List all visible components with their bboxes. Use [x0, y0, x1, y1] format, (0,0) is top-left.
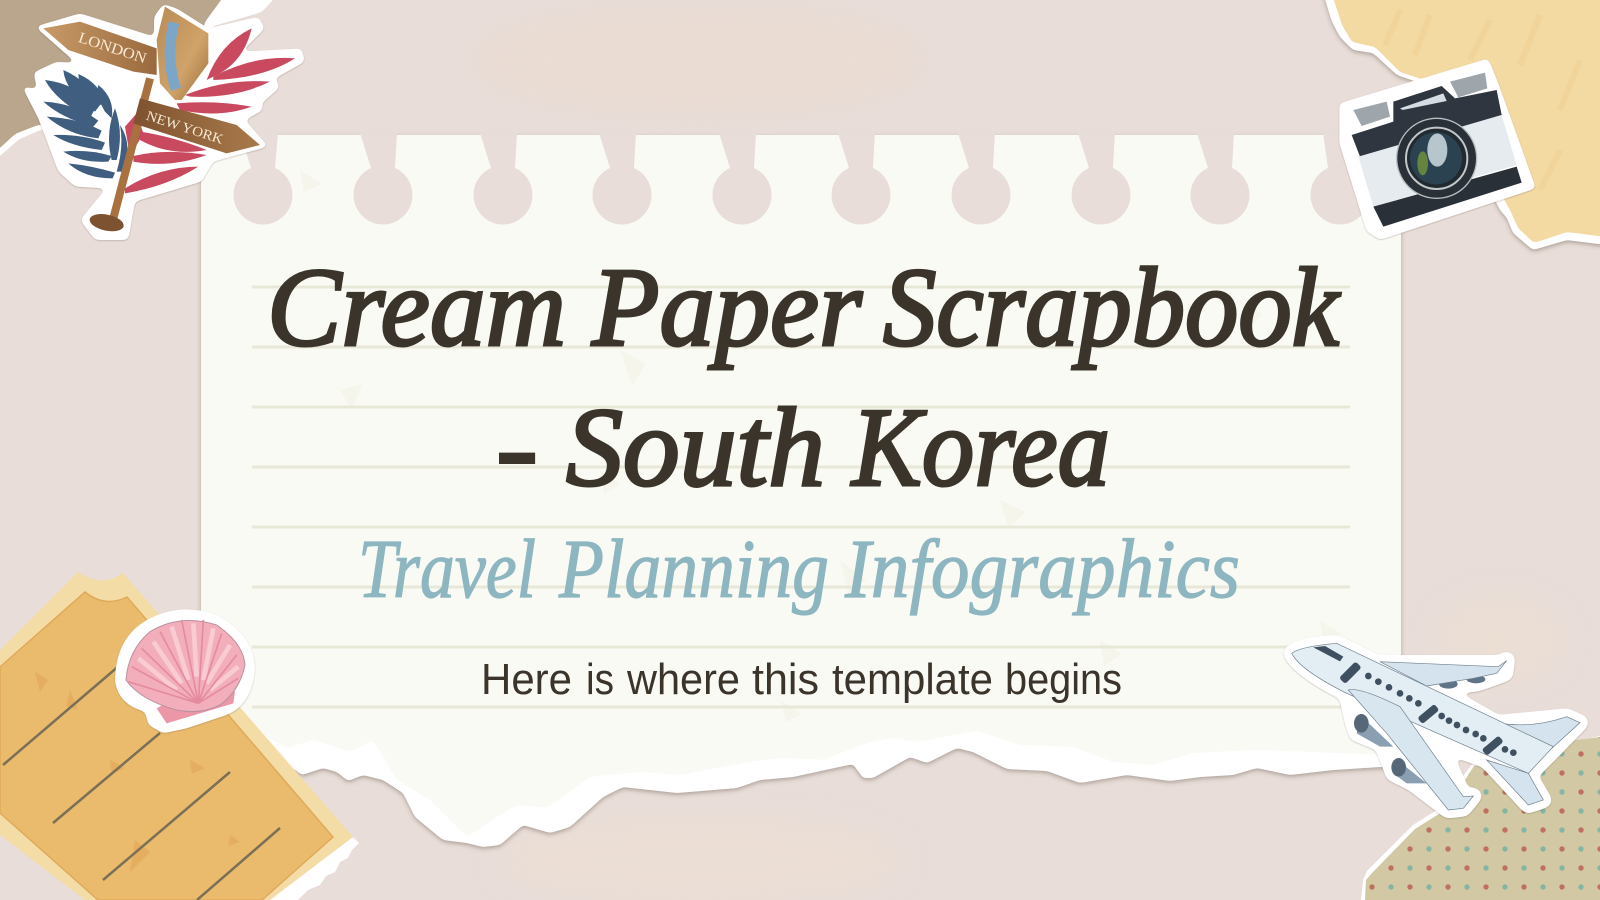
subtitle	[358, 523, 1240, 616]
sign: London	[43, 22, 157, 75]
dotted torn paper: bottom right	[1361, 736, 1600, 900]
tagline: is	[586, 655, 614, 704]
blue leaf	[43, 70, 127, 178]
tagline: where	[626, 655, 740, 704]
sticker: camera	[1339, 58, 1536, 240]
sticker: airplane	[1292, 643, 1580, 810]
ticket speckles	[35, 672, 240, 872]
torn white paper edge	[201, 135, 1401, 847]
title: Cream	[267, 246, 566, 370]
subtitle: Infographics	[844, 523, 1240, 616]
near wing	[1348, 690, 1473, 810]
fuselage	[1292, 643, 1553, 773]
title: Scrapbook	[883, 246, 1341, 370]
tagline: template	[832, 655, 993, 704]
torn corner: top right yellow paper	[1316, 0, 1600, 250]
title: -	[496, 386, 538, 510]
far wing	[1380, 661, 1507, 689]
binder holes	[234, 133, 1370, 224]
signpost pole	[88, 78, 150, 234]
ticket lines	[3, 665, 280, 900]
notebook paper	[201, 133, 1401, 847]
title: Paper	[591, 246, 862, 370]
tagline: Here	[481, 655, 572, 704]
tagline: this	[752, 655, 819, 704]
torn corner: top left kraft paper	[0, 0, 300, 170]
tagline: begins	[1005, 655, 1122, 704]
hat	[157, 7, 208, 100]
cream paper sheet	[201, 135, 1401, 837]
sign: New York: NEW YORK	[144, 109, 225, 148]
sticker: seashell	[115, 609, 255, 733]
sign: London: LONDON	[76, 29, 149, 67]
subtitle: Planning	[558, 523, 829, 616]
near engines	[1354, 714, 1427, 783]
airplane windows	[1313, 646, 1517, 756]
camera lens	[1397, 118, 1477, 198]
text block	[267, 246, 1341, 704]
title: Korea	[850, 386, 1110, 510]
title: South	[566, 386, 825, 510]
paper speckles	[300, 170, 1342, 722]
title	[267, 246, 1341, 510]
sticker: signposts, hat and leaves	[22, 4, 305, 240]
ruled lines	[252, 287, 1350, 707]
tail	[1487, 717, 1580, 805]
ticket	[0, 572, 359, 900]
camera body	[1352, 86, 1522, 227]
tagline	[481, 655, 1122, 704]
camera knobs	[1353, 73, 1487, 126]
red leaf	[125, 28, 295, 193]
sign: New York	[133, 98, 260, 153]
subtitle: Travel	[358, 523, 536, 616]
